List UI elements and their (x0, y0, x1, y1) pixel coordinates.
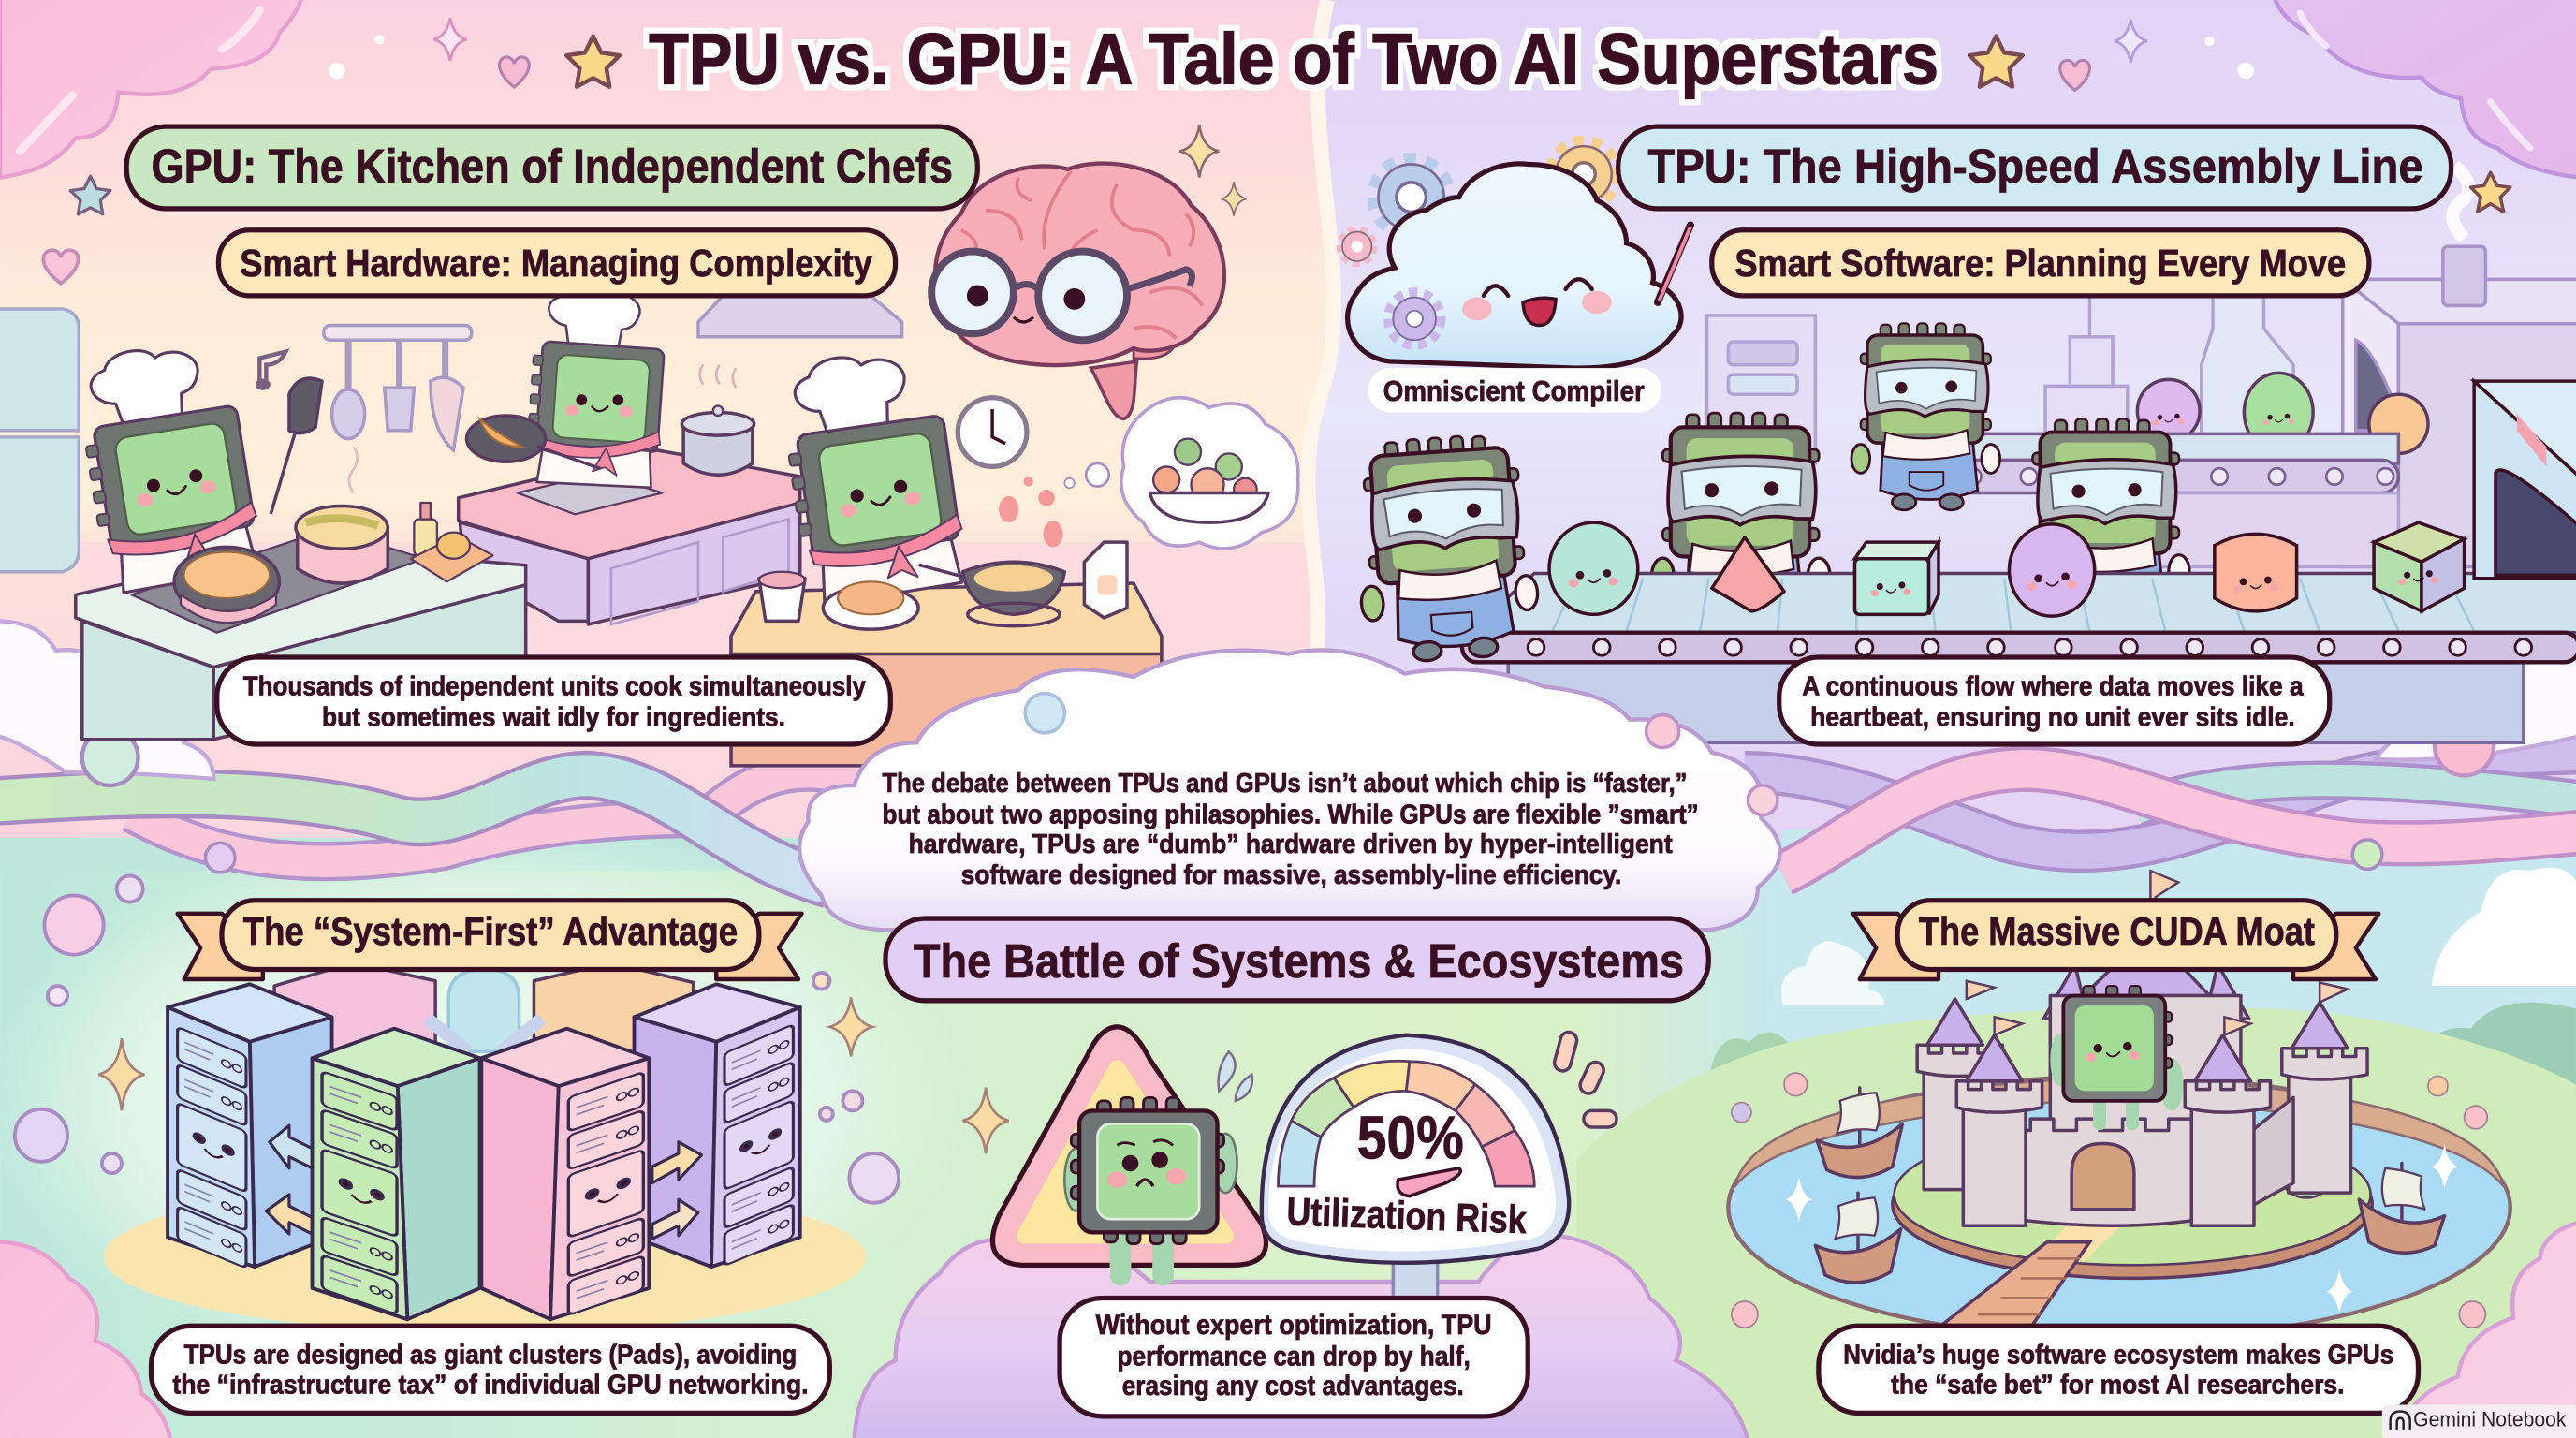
warning triangle (992, 1027, 1266, 1265)
heading: GPU (126, 126, 977, 209)
front conveyor (1462, 574, 2576, 742)
ribbon banner (178, 901, 802, 979)
caption (1819, 1326, 2418, 1413)
castle (1917, 961, 2367, 1225)
subheading: smart software (1712, 230, 2369, 296)
background machinery (2045, 296, 2293, 501)
bushes (1927, 1138, 2334, 1197)
blue server tower (168, 984, 332, 1269)
caption: GPU: but sometimes wait idly for ingredients. (322, 703, 785, 733)
corner cloud: bottom-left pink (0, 1242, 171, 1438)
bridge (1939, 1242, 2089, 1328)
cooling dome (427, 969, 542, 1051)
flying food dots (999, 463, 1109, 547)
caption (1060, 1298, 1528, 1416)
teal stove counter (76, 529, 526, 740)
gears (1340, 141, 1617, 263)
title decorations (329, 18, 2254, 91)
intro text: hardware, TPUs are “dumb” hardware driven by hyper-intelligent (909, 829, 1673, 859)
back cabinet (1707, 315, 1815, 463)
corner cloud: top-left pink (0, 0, 302, 178)
chef chip: right (776, 344, 970, 607)
conveyor items with faces (1549, 522, 2465, 616)
heading: TPU (1618, 126, 2452, 209)
omniscient compiler label (1368, 368, 1661, 413)
brain with glasses (931, 164, 1224, 419)
caption: the “safe bet” for most AI researchers. (1891, 1370, 2344, 1400)
ribbon banner: The Massive CUDA Moat (1919, 909, 2315, 953)
orange counter (731, 583, 1162, 766)
back racks (274, 962, 694, 1084)
boats (1815, 1088, 2445, 1283)
pink island counter (459, 450, 800, 624)
gauge post (1393, 1257, 1438, 1306)
worker chip: front left (1351, 432, 1542, 665)
sparkles and flowers (1732, 1073, 2487, 1328)
caption: TPU (1779, 657, 2330, 744)
chip on castle (2050, 986, 2183, 1123)
island (1893, 1123, 2372, 1278)
pale stars and hearts on the left (43, 176, 110, 284)
intro text (883, 769, 1699, 890)
gauge sign (1262, 1035, 1569, 1263)
heading: TPU: TPU: The High-Speed Assembly Line (1647, 139, 2423, 193)
gauge colour arc (1278, 1061, 1534, 1186)
corner cloud: bottom-right pink (2392, 1223, 2576, 1438)
cloud: bottom centre lavender and pink (855, 1236, 1748, 1438)
worker chip: centre-right (2022, 418, 2189, 629)
chef chip: left (72, 336, 265, 594)
panel: utilization risk (992, 1027, 1617, 1416)
ribbon banner (1853, 901, 2378, 979)
cloud: right white (2376, 621, 2576, 760)
subheading: smart hardware (218, 230, 896, 296)
clock (958, 398, 1027, 466)
watermark: Gemini Notebook (2413, 1407, 2566, 1431)
caption: performance can drop by half, (1117, 1341, 1471, 1372)
caption: GPU: Thousands of independent units cook simultaneously (243, 671, 866, 701)
range hood (698, 296, 902, 337)
back conveyor (1952, 433, 2398, 566)
cloud: left white (0, 621, 213, 779)
left pan (174, 547, 279, 623)
gauge needle (1398, 1168, 1460, 1196)
spatula (271, 378, 322, 513)
caption: Without expert optimization, TPU (1096, 1310, 1492, 1341)
caption: erasing any cost advantages. (1122, 1371, 1464, 1401)
sand base (104, 1181, 866, 1332)
pink server tower (481, 1029, 649, 1319)
heading: GPU: GPU: The Kitchen of Independent Chefs (152, 139, 953, 193)
watermark (2382, 1405, 2576, 1438)
purple server tower (634, 984, 800, 1267)
castle flags (1967, 871, 2348, 1035)
beads on ribbons (82, 716, 2494, 873)
intro text: software designed for massive, assembly-line efficiency. (961, 860, 1621, 890)
worker chip: back (1852, 323, 2000, 510)
blue machine (2474, 381, 2576, 579)
panel: GPU kitchen (0, 125, 1298, 766)
worker chip: centre-left (1652, 413, 1830, 637)
thought bubble with salad (1121, 398, 1298, 549)
sad chip (1064, 1051, 1252, 1275)
omniscient compiler cloud (1348, 164, 1690, 368)
green server tower (313, 1029, 480, 1319)
caption (152, 1326, 829, 1413)
gauge 50 percent: 50% (1357, 1103, 1464, 1171)
corner cloud: top-right purple (2274, 0, 2576, 178)
caption: TPUs are designed as giant clusters (Pads), avoiding (184, 1341, 797, 1371)
arrows between towers (266, 1125, 701, 1239)
subheading: smart software: Smart Software: Planning Every Move (1734, 242, 2346, 285)
caption: Nvidia’s huge software ecosystem makes GPUs (1843, 1341, 2393, 1371)
gauge label: Utilization Risk (1286, 1189, 1528, 1241)
moat (1728, 1077, 2510, 1339)
silver pot (681, 365, 754, 475)
ribbons dividing the sections (0, 753, 2576, 884)
caption: GPU (217, 657, 890, 744)
signal capsules (1553, 1031, 1617, 1127)
star near TPU heading (2471, 172, 2510, 212)
omniscient compiler label: Omniscient Compiler (1383, 374, 1645, 407)
intro text: The debate between TPUs and GPUs isn’t about which chip is “faster,” (883, 769, 1687, 799)
subheading: smart hardware: Smart Hardware: Managing Complexity (240, 242, 872, 285)
oil bottle and butter (411, 503, 493, 581)
caption: TPU: heartbeat, ensuring no unit ever sits idle. (1810, 703, 2295, 733)
fridge (0, 309, 79, 572)
pink pot (296, 447, 388, 583)
back balls (2137, 373, 2428, 453)
bubbles and sparkles (15, 875, 899, 1203)
frying pan with food (466, 416, 600, 468)
intro text: but about two apposing philasophies. While GPUs are flexible ”smart” (883, 800, 1699, 829)
ribbon banner: The “System-First” Advantage (243, 909, 738, 953)
title: TPU vs. GPU: A Tale of Two AI Superstars (649, 20, 1939, 100)
small bubbles around centre cloud (1025, 694, 1778, 814)
heading: battle of systems: The Battle of Systems & Ecosystems (914, 934, 1684, 988)
sparkles around brain (1179, 125, 1247, 216)
panel: TPU assembly line (1340, 141, 2576, 742)
panel: system-first advantage (15, 875, 1009, 1413)
panel: CUDA moat (1728, 871, 2510, 1413)
heading: battle of systems (886, 918, 1708, 1001)
utensil rack (324, 325, 472, 450)
chef chip: middle (525, 282, 671, 491)
factory machine (2343, 166, 2576, 566)
caption: TPU: A continuous flow where data moves like a (1802, 671, 2304, 701)
caption: the “infrastructure tax” of individual GPU networking. (172, 1370, 809, 1400)
music note (256, 352, 285, 390)
cup, plate, pan, milk carton (759, 542, 1127, 629)
centre cloud with intro text (799, 650, 1780, 930)
